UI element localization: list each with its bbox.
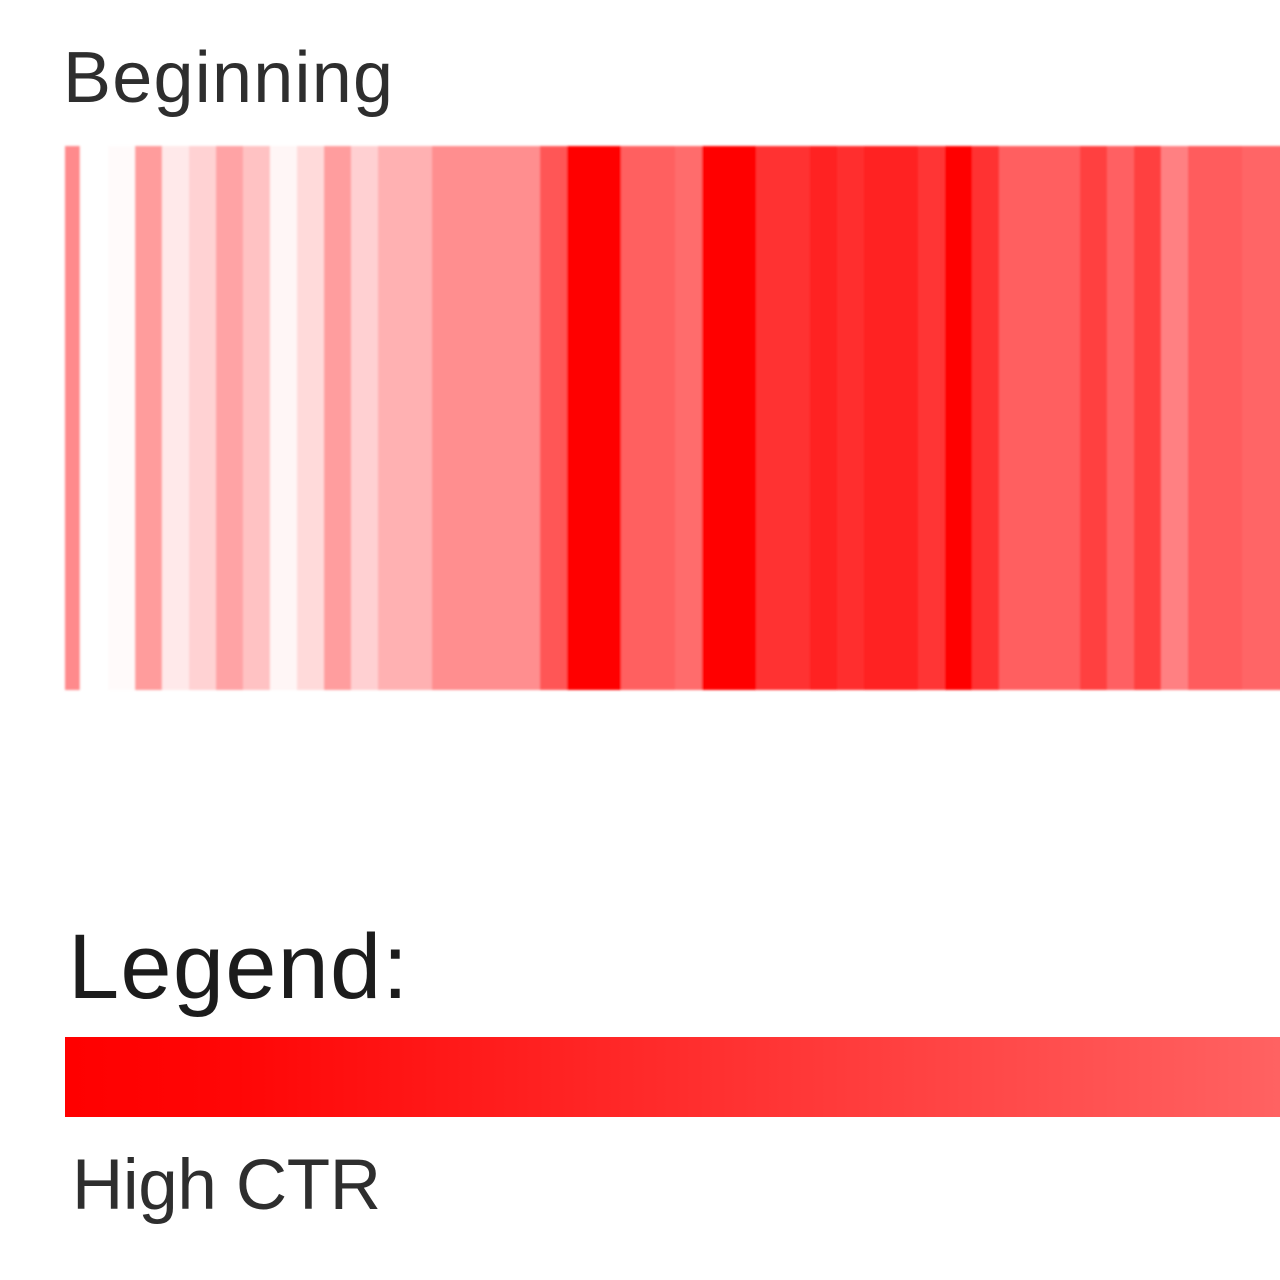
heading: Beginning: Beginning <box>63 38 393 118</box>
heat strip: CTR over time <box>65 146 1280 690</box>
legend gradient bar <box>65 1037 1280 1117</box>
legend label: High CTR: High CTR <box>72 1146 381 1225</box>
heading: Legend: Legend: <box>68 916 408 1018</box>
